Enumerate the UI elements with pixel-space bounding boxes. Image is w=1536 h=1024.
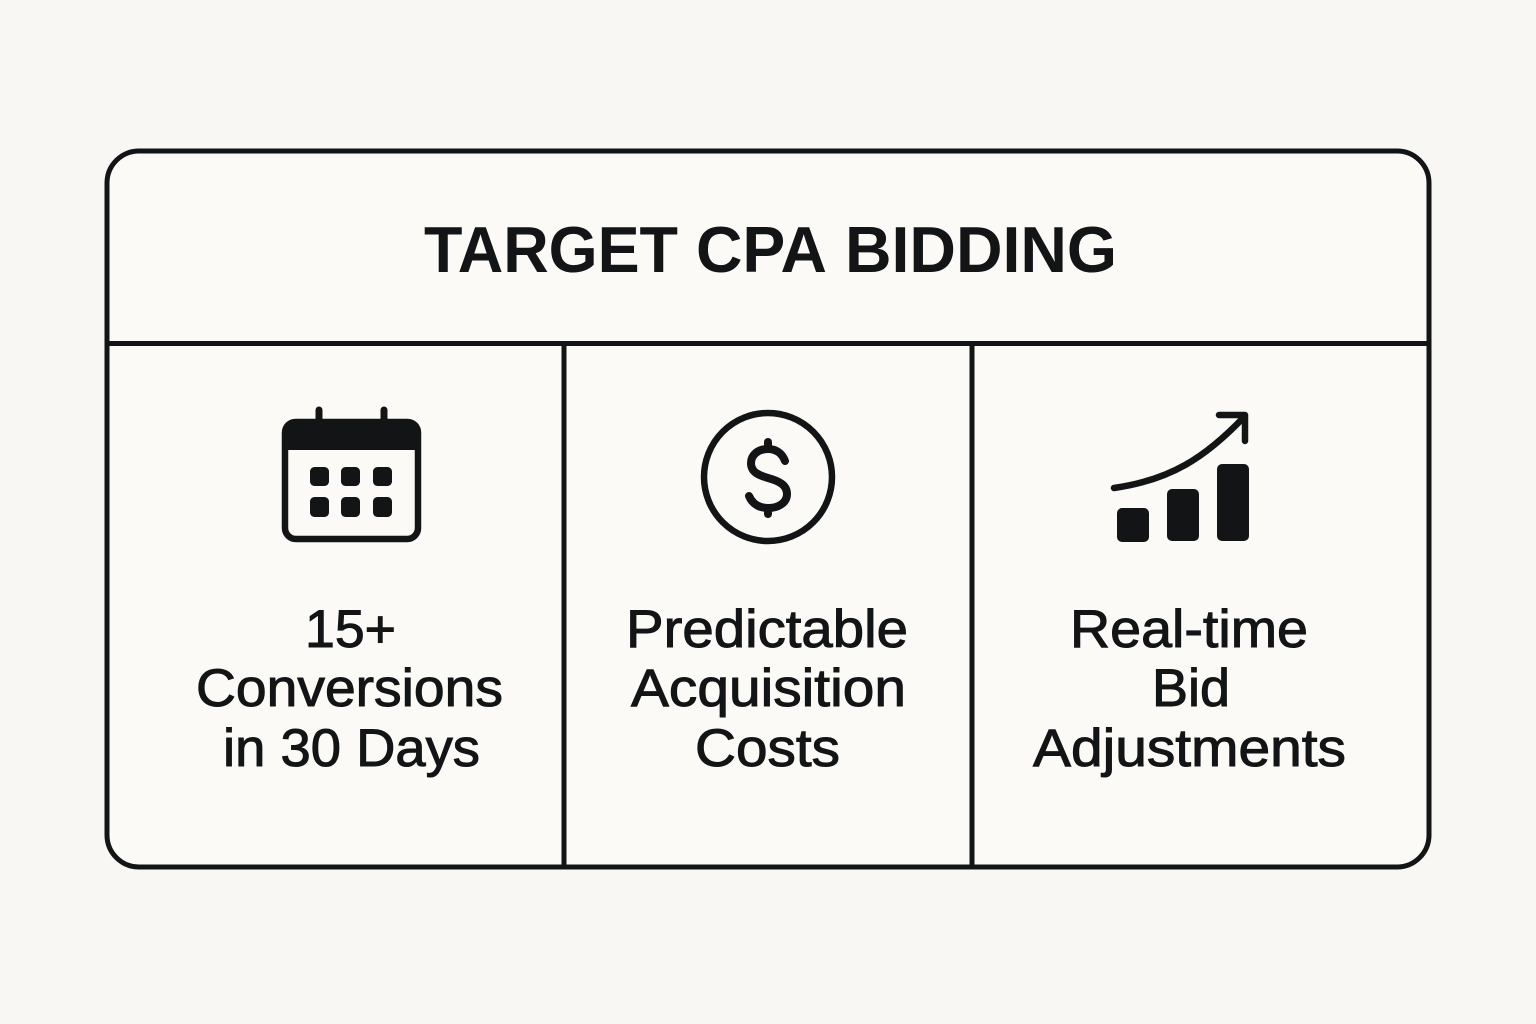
label: Predictable Acquisition Costs: [626, 600, 908, 778]
label: Real-time Bid Adjustments: Adjustments: [1033, 719, 1346, 778]
title: TARGET: [424, 213, 678, 286]
icon: dollar coin: [704, 413, 832, 541]
icon: calendar: [282, 410, 421, 539]
label: 15+ Conversions in 30 Days: Conversions: [196, 659, 503, 718]
label: Predictable Acquisition Costs: Predictable: [626, 600, 908, 659]
title: CPA: [696, 213, 827, 286]
title: [424, 213, 1117, 286]
label: Real-time Bid Adjustments: [1033, 600, 1346, 778]
label: Predictable Acquisition Costs: Costs: [695, 719, 840, 778]
panel: main card: [107, 151, 1429, 867]
panel: conversions: [196, 410, 503, 778]
title: BIDDING: [845, 213, 1117, 286]
label: 15+ Conversions in 30 Days: in 30 Days: [223, 719, 480, 778]
label: Real-time Bid Adjustments: Real-time: [1070, 600, 1308, 659]
icon: growth chart: [1114, 415, 1249, 542]
label: 15+ Conversions in 30 Days: [196, 600, 503, 778]
label: 15+ Conversions in 30 Days: 15+: [305, 600, 396, 659]
panel: bid adjustments: [1033, 415, 1346, 778]
label: Real-time Bid Adjustments: Bid: [1152, 659, 1230, 718]
label: Predictable Acquisition Costs: Acquisition: [631, 659, 906, 718]
panel: acquisition costs: [626, 413, 908, 778]
